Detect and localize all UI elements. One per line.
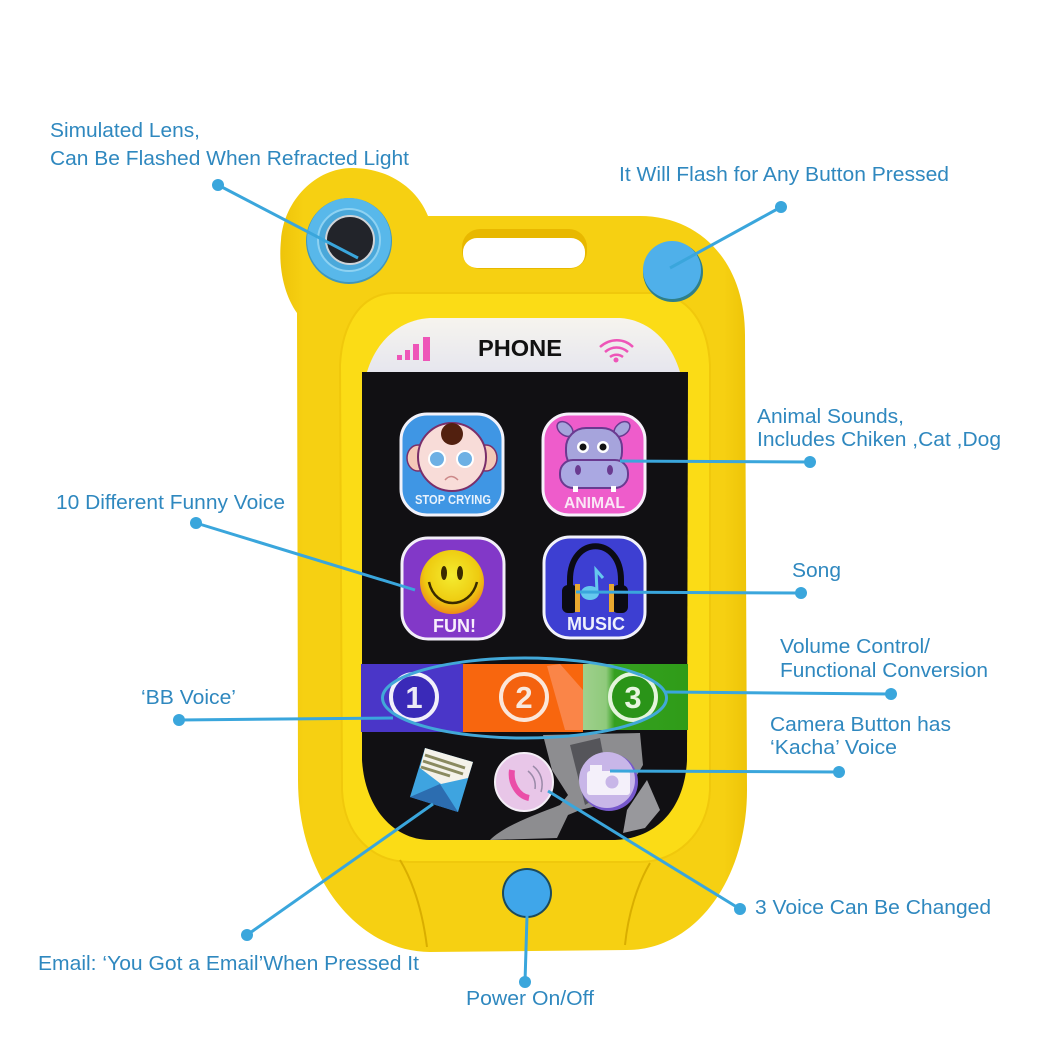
- label: volume control: Functional Conversion: [780, 660, 988, 682]
- callout ellipse: [382, 658, 666, 738]
- label: camera: Camera Button has: [770, 714, 951, 736]
- label: camera: [770, 714, 951, 759]
- button 2: 2: [515, 680, 533, 715]
- phone label: PHONE: [478, 335, 562, 361]
- leader: song: [576, 587, 807, 599]
- leader: camera: [610, 766, 845, 778]
- icon: phone call button: [495, 753, 553, 811]
- app: animal: [543, 414, 645, 515]
- status bar: [367, 318, 680, 372]
- flash button: [643, 241, 703, 302]
- button 1: 1: [405, 680, 423, 715]
- leader: email: [241, 804, 433, 941]
- icon: signal bars: [397, 337, 430, 361]
- button 3: 3: [624, 680, 642, 715]
- app: stop crying: STOP CRYING: [415, 492, 491, 507]
- label: simulated lens: [50, 120, 409, 170]
- label: power: Power On/Off: [466, 988, 594, 1010]
- label: camera: ‘Kacha’ Voice: [770, 737, 897, 759]
- button 1: [391, 674, 437, 720]
- app: animal: ANIMAL: [564, 495, 625, 512]
- label: volume control: Volume Control/: [780, 636, 930, 658]
- hanging slot: [462, 229, 587, 269]
- lens: [306, 198, 392, 284]
- label: voice change: 3 Voice Can Be Changed: [755, 897, 991, 919]
- power button: [502, 868, 552, 918]
- label: simulated lens: Can Be Flashed When Refracted Light: [50, 148, 409, 170]
- app: stop crying: [401, 414, 503, 515]
- icon: camera button: [579, 752, 638, 811]
- label: animal sounds: [757, 406, 1001, 451]
- label: flash: It Will Flash for Any Button Pressed: [619, 164, 949, 186]
- label: animal sounds: Includes Chiken ,Cat ,Dog: [757, 429, 1001, 451]
- button 3: [610, 674, 656, 720]
- label: volume control: [780, 636, 988, 682]
- button 2: [501, 674, 547, 720]
- leader: animal: [620, 456, 816, 468]
- phone toy body: [280, 168, 747, 952]
- app: fun: [402, 538, 504, 639]
- leader: volume: [666, 688, 897, 700]
- leader: funny voice: [190, 517, 415, 590]
- label: animal sounds: Animal Sounds,: [757, 406, 904, 428]
- leader: voice change: [548, 791, 746, 915]
- leader: bb voice: [173, 714, 393, 726]
- app: music: MUSIC: [567, 614, 625, 634]
- icon: wifi: [600, 340, 633, 362]
- icon: envelope: [410, 748, 473, 812]
- screen: [361, 318, 688, 840]
- label: song: Song: [792, 560, 841, 582]
- label: simulated lens: Simulated Lens,: [50, 120, 200, 142]
- label: funny voice: 10 Different Funny Voice: [56, 492, 285, 514]
- app: fun: FUN!: [433, 616, 476, 636]
- leader: power: [519, 916, 531, 988]
- app: music: [544, 537, 645, 638]
- label: bb voice: ‘BB Voice’: [141, 687, 236, 709]
- leader: lens: [212, 179, 358, 258]
- label: email: Email: ‘You Got a Email’When Pressed It: [38, 953, 419, 975]
- leader: flash: [670, 201, 787, 268]
- number strip: [361, 664, 688, 732]
